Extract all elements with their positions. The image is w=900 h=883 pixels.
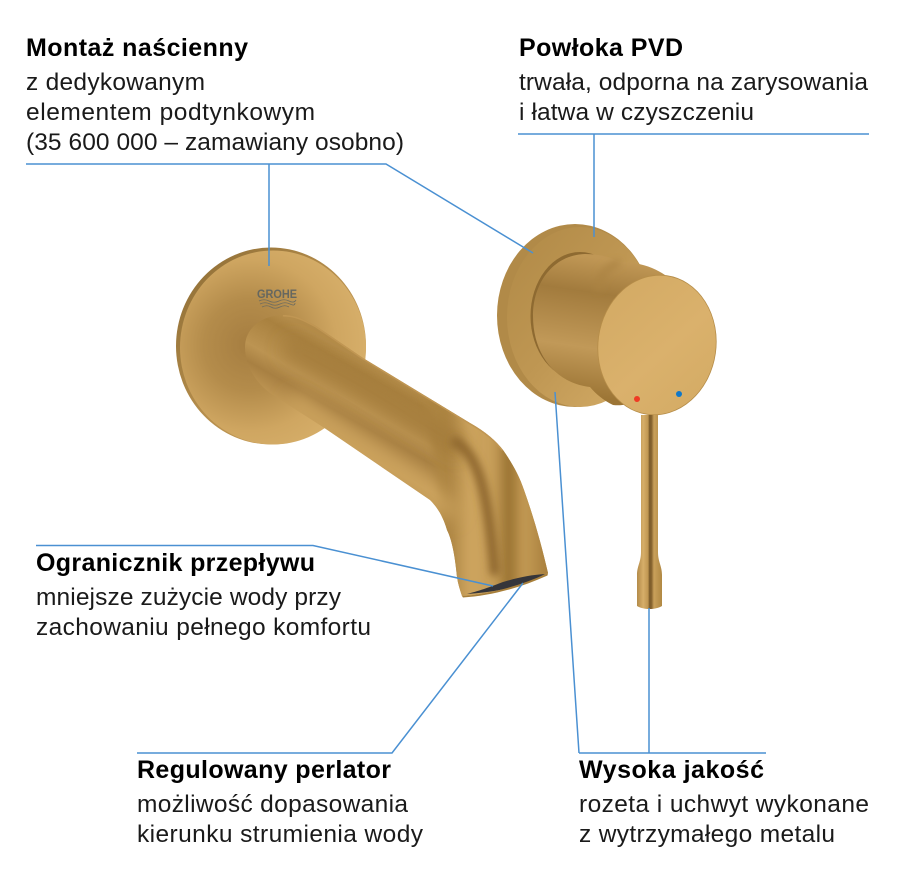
label: wall mounting: Montaż naścienny: [26, 34, 248, 62]
spout body: [245, 315, 548, 596]
label: flow limiter: Ogranicznik przepływu: [36, 549, 315, 577]
aerator outlet: [467, 574, 545, 594]
label: adjustable aerator: [137, 583, 523, 848]
label: PVD coating: Powłoka PVD: [519, 34, 683, 62]
label: PVD coating: i łatwa w czyszczeniu: [519, 99, 754, 126]
handle body: [533, 254, 665, 405]
label: high quality: [555, 392, 869, 848]
label: PVD coating: [518, 34, 869, 237]
label: high quality: z wytrzymałego metalu: [579, 821, 835, 848]
handle front disc: [589, 267, 725, 423]
label: wall mounting: [26, 34, 533, 266]
label: PVD coating: trwała, odporna na zarysowania: [519, 69, 868, 96]
faucet handle: [497, 224, 725, 609]
label: wall mounting: z dedykowanym: [26, 69, 205, 96]
logo GROHE: [257, 289, 297, 308]
label: flow limiter: mniejsze zużycie wody przy: [36, 584, 342, 611]
label: wall mounting: elementem podtynkowym: [26, 99, 315, 126]
hot dot: [634, 396, 640, 402]
faucet spout: [176, 248, 570, 610]
left wall rosette: [176, 248, 366, 444]
label: high quality: rozeta i uchwyt wykonane: [579, 791, 869, 818]
label: wall mounting: (35 600 000 – zamawiany osobno): [26, 129, 404, 156]
lever: [637, 415, 662, 609]
cold dot: [676, 391, 682, 397]
label: flow limiter: zachowaniu pełnego komfortu: [36, 614, 371, 641]
logo GROHE: GROHE: [257, 289, 297, 301]
right wall rosette: [497, 224, 653, 407]
label: adjustable aerator: możliwość dopasowania: [137, 791, 408, 818]
label: high quality: Wysoka jakość: [579, 756, 764, 784]
label: flow limiter: [36, 546, 493, 641]
label: adjustable aerator: Regulowany perlator: [137, 756, 391, 784]
neck of the handle: [530, 252, 630, 380]
label: adjustable aerator: kierunku strumienia wody: [137, 821, 424, 848]
